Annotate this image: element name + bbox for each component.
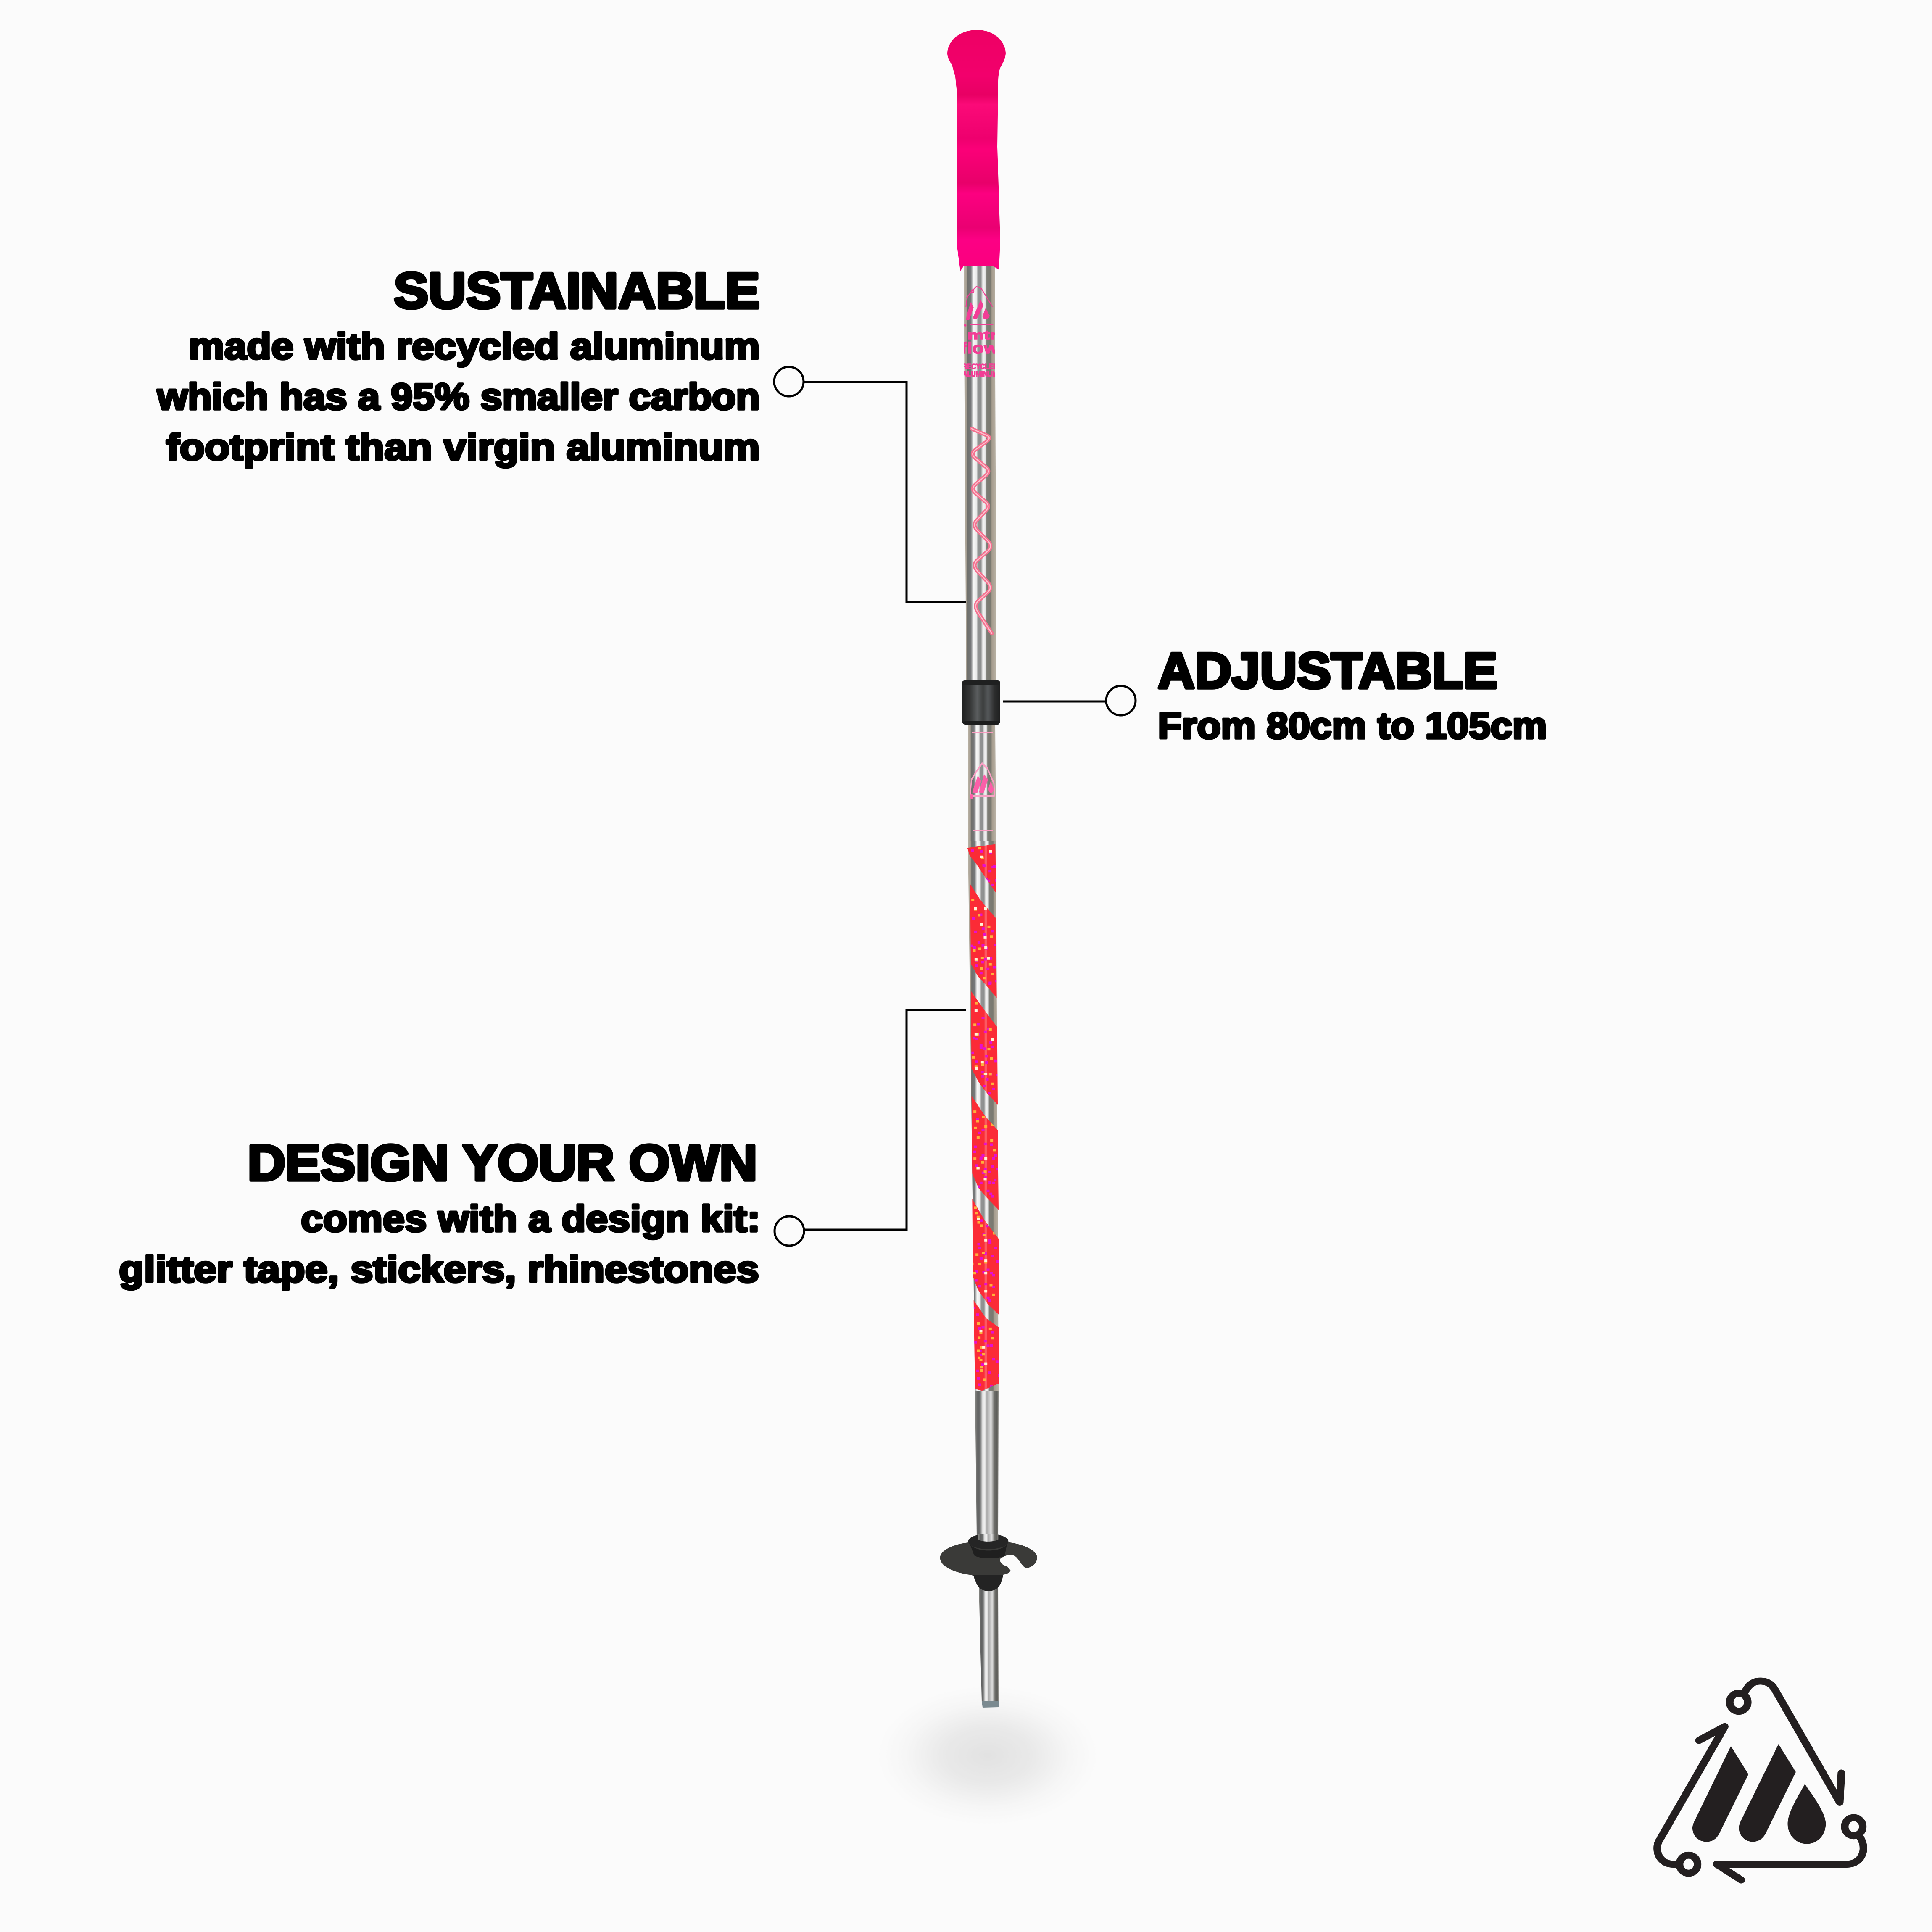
text: design your own description: comes with a design kit: [301, 1198, 760, 1239]
black adjustment collar [962, 680, 1000, 725]
leader line: sustainable [774, 367, 966, 602]
leader line: design your own [775, 1010, 966, 1246]
heading: adjustable: ADJUSTABLE [1158, 643, 1497, 699]
mountain peaks and drop [1692, 1744, 1826, 1844]
text: sustainable description [157, 325, 760, 468]
pole shadow [878, 1686, 1098, 1825]
text: adjustable description: From 80cm to 105cm [1158, 705, 1547, 746]
text: design your own description [119, 1198, 760, 1290]
leader line: adjustable [1003, 686, 1136, 715]
callout: adjustable [1003, 643, 1547, 746]
text: sustainable description: footprint than virgin aluminum [166, 426, 760, 468]
brand logo on shaft: flow [961, 340, 999, 357]
heading: sustainable: SUSTAINABLE [394, 263, 760, 319]
text: sustainable description: made with recycled aluminum [189, 325, 760, 367]
brand logo on shaft: RECYCLED [962, 362, 998, 371]
callout: sustainable [157, 263, 966, 602]
glitter tape spiral [967, 841, 1000, 1400]
heading: design your own: DESIGN YOUR OWN [248, 1135, 757, 1191]
text: design your own description: glitter tape, stickers, rhinestones [119, 1248, 759, 1290]
lower logo and height marks [970, 732, 995, 831]
pink grip [947, 30, 1006, 271]
ski pole [940, 30, 1037, 1708]
pink zigzag marking [972, 429, 992, 633]
callout: design your own [119, 1010, 966, 1290]
brand logo on shaft: ALUMINUM [962, 370, 998, 378]
recycling arrows [1657, 1681, 1863, 1880]
pole basket [940, 1534, 1037, 1591]
icon: recycled mountain logo [1657, 1681, 1863, 1880]
text: sustainable description: which has a 95% smaller carbon [157, 376, 760, 417]
brand logo on shaft [964, 286, 995, 377]
pole shaft [964, 266, 999, 1708]
brand logo on shaft: mtn [967, 328, 1001, 342]
glitter sparkles [971, 845, 999, 1389]
